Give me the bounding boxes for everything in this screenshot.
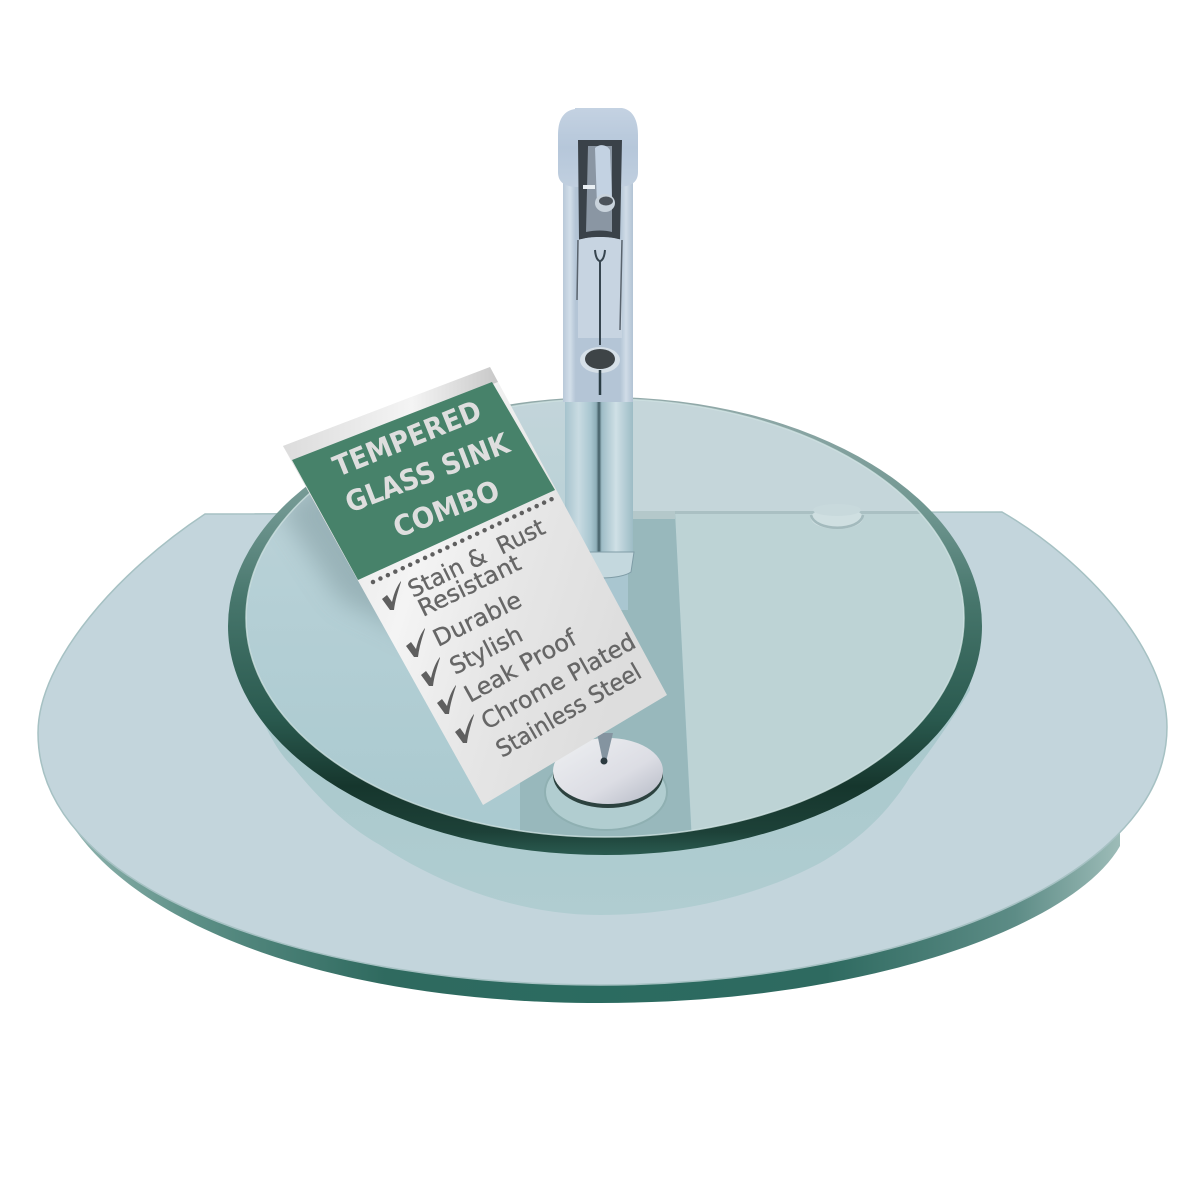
left shadow behind card — [281, 494, 385, 630]
feature list: Leak Proof — [459, 623, 582, 708]
faucet — [558, 108, 638, 610]
centre reflected strip — [520, 512, 692, 845]
faucet collar — [568, 552, 634, 578]
check marks — [382, 581, 474, 743]
feature list: Durable — [428, 586, 526, 652]
heading: Tempered Glass Sink Combo: COMBO — [389, 474, 504, 545]
feature list: Stain & Rust — [403, 513, 550, 603]
drain — [545, 733, 667, 830]
stream line — [595, 250, 605, 345]
feature list: Stainless Steel — [491, 657, 646, 763]
feature list: Resistant — [413, 549, 525, 622]
drain chrome disc — [553, 742, 663, 808]
shelf top surface — [38, 512, 1167, 985]
feature list: Stylish — [445, 620, 527, 680]
faucet neck — [578, 570, 628, 610]
overflow knob — [811, 504, 863, 529]
spout highlight — [595, 145, 612, 205]
back wall above shelf line — [633, 479, 917, 511]
heading: Tempered Glass Sink Combo: GLASS SINK — [341, 426, 515, 520]
card top strip — [283, 367, 498, 460]
dotted divider — [373, 499, 552, 582]
shelf line — [675, 511, 920, 514]
bowl underside — [240, 620, 970, 915]
glass shelf — [38, 395, 1167, 1003]
interior glass — [246, 400, 846, 831]
faucet body upper — [563, 170, 633, 402]
aerator — [580, 347, 620, 373]
right reflected panel — [680, 596, 963, 830]
lower reflection panel — [578, 237, 622, 338]
feature list — [403, 513, 646, 763]
rim inner highlight — [246, 399, 964, 837]
product illustration and feature card — [37, 108, 1168, 1003]
drain glass collar — [545, 754, 667, 830]
heading: Tempered Glass Sink Combo: TEMPERED — [328, 394, 486, 483]
feature list: Chrome Plated — [476, 627, 640, 735]
heading: Tempered Glass Sink Combo — [328, 394, 515, 545]
feature card — [283, 367, 667, 805]
green header band — [292, 382, 555, 580]
bowl rim — [228, 397, 982, 855]
faucet cap — [558, 108, 638, 187]
card sheet — [283, 367, 667, 805]
dark spout reflection — [578, 140, 622, 240]
faucet body lower — [565, 395, 633, 560]
bowl interior — [240, 395, 970, 845]
shelf edge — [70, 790, 1120, 1003]
